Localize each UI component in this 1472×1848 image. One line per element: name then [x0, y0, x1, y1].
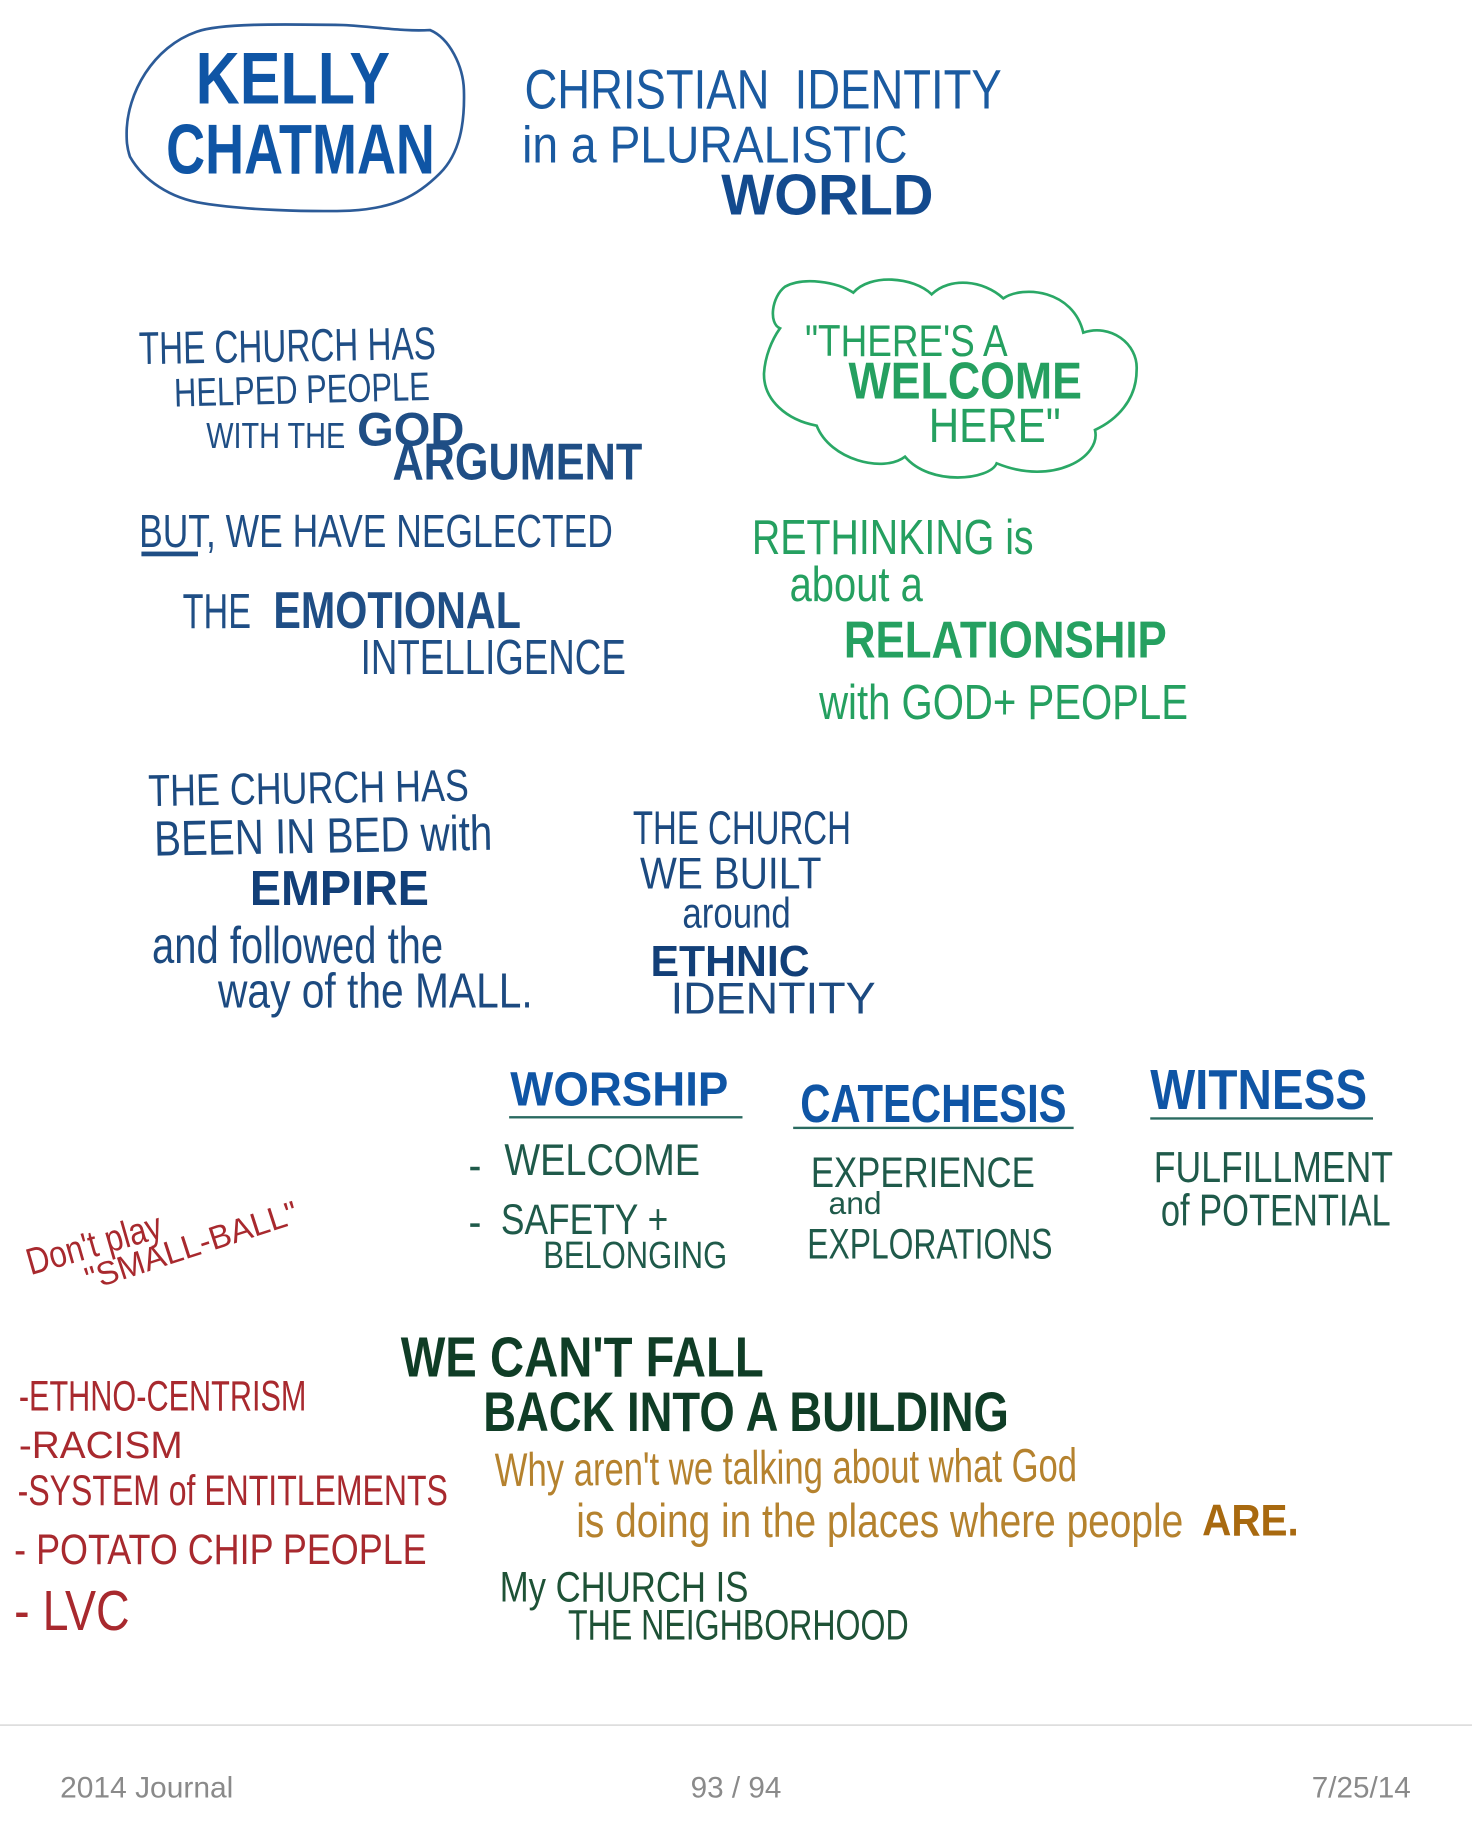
text block: empire: BEEN IN BED with [154, 806, 493, 867]
body: and [829, 1185, 882, 1221]
panel: name bubble [127, 24, 464, 211]
text block: God argument: WITH THE [206, 415, 345, 456]
title: WORLD [721, 164, 933, 228]
bubble outline [127, 24, 464, 211]
body: of POTENTIAL [1161, 1186, 1391, 1236]
red list: - POTATO CHIP PEOPLE [14, 1526, 427, 1573]
text block: God argument: GOD [357, 403, 464, 456]
body: EXPERIENCE [811, 1149, 1035, 1196]
text block: God argument [138, 317, 643, 491]
text block: ethnic identity: IDENTITY [671, 974, 876, 1024]
text block: neighborhood: My CHURCH IS [500, 1564, 748, 1611]
text block: ethnic identity: THE CHURCH [633, 801, 851, 854]
footer [0, 1724, 1472, 1804]
text block: God argument: THE CHURCH HAS [138, 317, 436, 374]
footer: 7/25/14 [1312, 1771, 1411, 1804]
text block: emotional intelligence: EMOTIONAL [273, 581, 521, 639]
red list: -RACISM [19, 1424, 183, 1466]
text block: empire [148, 761, 533, 1019]
title: in a PLURALISTIC [522, 116, 907, 174]
quote text: HERE" [929, 399, 1061, 453]
text block: where people are [495, 1438, 1299, 1547]
headline: building: BACK INTO A BUILDING [483, 1381, 1009, 1443]
text block: where people are: Why aren't we talking about what God [495, 1438, 1077, 1496]
red list: -ETHNO-CENTRISM [19, 1373, 306, 1420]
text block: rethinking: RETHINKING is [752, 510, 1034, 565]
note: small-ball: "SMALL-BALL" [80, 1194, 302, 1297]
headline: building: WE CAN'T FALL [401, 1326, 764, 1389]
text block: empire: EMPIRE [250, 861, 429, 916]
text block: empire: way of the MALL. [217, 964, 533, 1019]
text block: neighborhood [500, 1564, 909, 1648]
panel: welcome cloud [764, 280, 1137, 477]
text block: emotional intelligence: BUT, WE HAVE NEGLECTED [139, 505, 613, 557]
text block: emotional intelligence [139, 505, 626, 685]
text block: rethinking: about a [790, 557, 923, 612]
column: catechesis [793, 1074, 1074, 1268]
column: worship [470, 1062, 742, 1276]
footer: 2014 Journal [60, 1771, 233, 1804]
text block: rethinking: with GOD+ PEOPLE [818, 675, 1188, 730]
text block: rethinking [752, 510, 1188, 730]
body: EXPLORATIONS [807, 1221, 1052, 1268]
heading: WITNESS [1150, 1058, 1367, 1121]
red list [14, 1373, 448, 1642]
list: WELCOME [504, 1135, 700, 1185]
quote text: WELCOME [849, 351, 1082, 409]
quote text: "THERE'S A [805, 316, 1008, 366]
headline: building [401, 1326, 1009, 1443]
text block: where people are: ARE. [1202, 1496, 1299, 1546]
name: Chatman: CHATMAN [166, 109, 435, 188]
text block: God argument: HELPED PEOPLE [174, 365, 430, 416]
text block: neighborhood: THE NEIGHBORHOOD [568, 1601, 909, 1648]
text block: emotional intelligence: INTELLIGENCE [361, 630, 626, 685]
body [1154, 1144, 1393, 1236]
text block: where people are: is doing in the places where people [576, 1494, 1183, 1547]
column: witness [1150, 1058, 1393, 1236]
text block: God argument: ARGUMENT [392, 433, 643, 491]
text block: empire: and followed the [152, 916, 443, 974]
text block: rethinking: RELATIONSHIP [844, 611, 1167, 669]
text block: emotional intelligence: THE [183, 584, 251, 639]
list: SAFETY + [501, 1196, 668, 1243]
red list: -SYSTEM of ENTITLEMENTS [18, 1467, 448, 1514]
heading: CATECHESIS [800, 1074, 1067, 1134]
text block: ethnic identity: around [682, 890, 791, 937]
cloud outline [764, 280, 1137, 477]
list [470, 1135, 727, 1276]
body [807, 1149, 1052, 1268]
text block: ethnic identity: ETHNIC [651, 938, 810, 986]
red list: - LVC [14, 1579, 130, 1642]
footer: 93 / 94 [691, 1771, 781, 1804]
text block: ethnic identity [633, 801, 876, 1024]
name: Kelly: KELLY [196, 39, 390, 120]
heading: WORSHIP [510, 1062, 728, 1116]
text block: ethnic identity: WE BUILT [640, 849, 821, 899]
body: FULFILLMENT [1154, 1144, 1393, 1192]
note: small-ball: Don't play [21, 1204, 167, 1283]
title: CHRISTIAN IDENTITY [524, 58, 1002, 120]
list: BELONGING [543, 1234, 727, 1276]
title [522, 58, 1002, 228]
text block: empire: THE CHURCH HAS [148, 761, 469, 816]
quote text [805, 316, 1082, 453]
